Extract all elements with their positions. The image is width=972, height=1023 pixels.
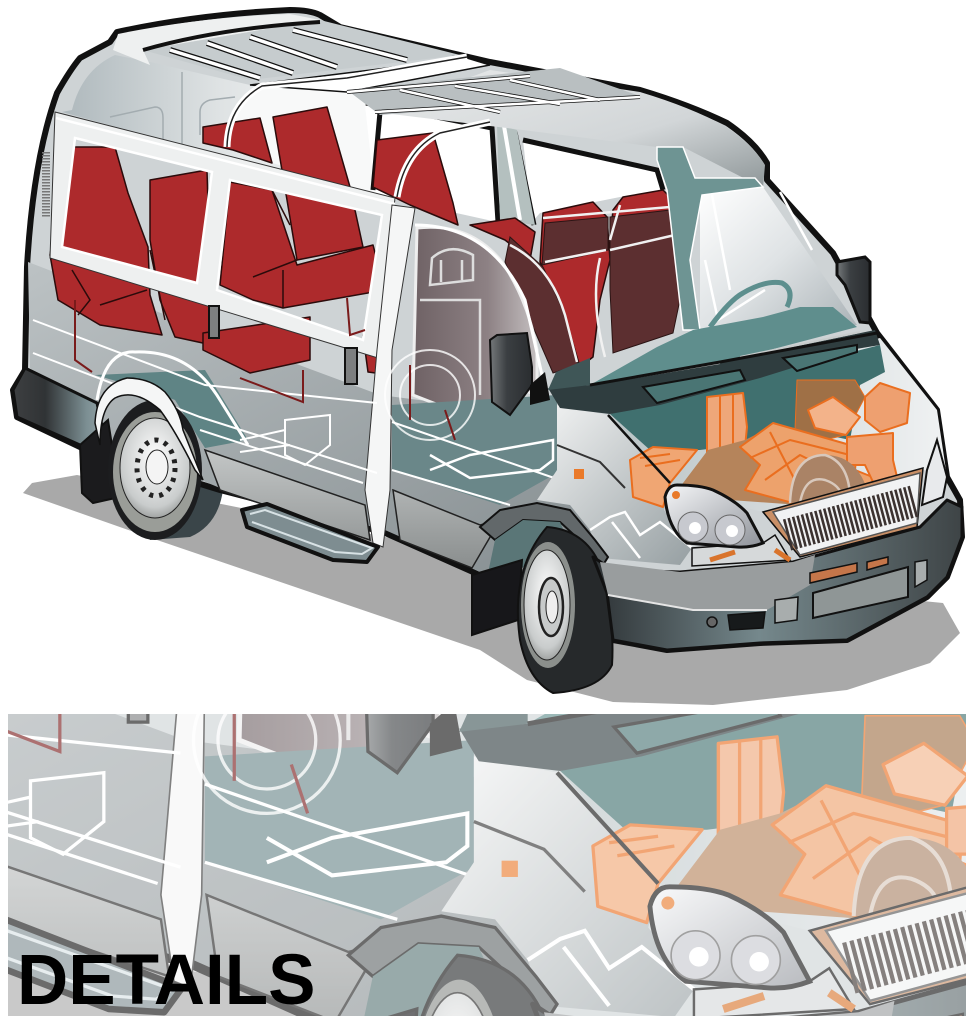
fender crease — [557, 445, 625, 488]
roof hoop rails — [227, 57, 490, 197]
brake lines — [75, 298, 455, 440]
front bumper — [593, 500, 962, 650]
side step — [242, 504, 378, 562]
seat contour lines — [72, 190, 297, 320]
enlarged van crop — [8, 714, 966, 1016]
dashboard — [590, 307, 857, 385]
door handles — [209, 306, 357, 384]
upper body pillar — [365, 205, 415, 547]
hood teal area — [610, 345, 885, 450]
roof rack — [143, 20, 640, 115]
minivan illustration — [13, 10, 962, 705]
wheel-well interior — [488, 520, 570, 573]
lower door sill — [205, 450, 500, 568]
right headlight — [922, 440, 947, 505]
rear vent grille — [42, 152, 50, 218]
body silhouette — [13, 10, 962, 650]
wipers and vents — [643, 345, 857, 403]
front mud flap — [472, 560, 522, 635]
rear wheel — [108, 400, 202, 540]
bumper openings — [707, 557, 927, 630]
interior panel outlines — [110, 72, 235, 160]
headlight — [665, 485, 763, 547]
front roof panel — [375, 70, 765, 188]
rear roof pillar — [113, 14, 320, 65]
far-side tyre — [110, 410, 223, 540]
far mirror — [837, 257, 870, 323]
rear seats — [50, 107, 682, 375]
engine cylinder — [790, 455, 870, 503]
front seat dark backs — [505, 210, 682, 373]
front fender — [537, 405, 692, 565]
door frame curve — [415, 225, 542, 375]
ground shadow — [23, 475, 960, 705]
side marker — [574, 469, 584, 479]
rear bumper — [13, 368, 105, 445]
rear interior wall — [62, 55, 380, 200]
rear wheel well teal — [95, 370, 248, 448]
chassis rails — [33, 320, 670, 525]
suspension outlines — [97, 352, 248, 445]
A pillar — [657, 147, 763, 330]
windscreen interior lines — [705, 192, 812, 320]
steering wheel — [710, 282, 790, 327]
rear wheel arch — [95, 378, 203, 480]
far side window openings — [365, 105, 663, 222]
grille — [763, 468, 923, 557]
engine parts — [630, 380, 910, 507]
rear mud flap — [80, 420, 120, 503]
hood — [610, 338, 947, 512]
lower body side — [28, 262, 605, 572]
near mirror — [490, 333, 532, 415]
white seat outlines — [510, 205, 675, 362]
bumper upper lighter band — [600, 555, 815, 610]
windscreen — [700, 187, 857, 330]
under-headlight bracket — [692, 535, 790, 566]
heading: DETAILS: DETAILS — [17, 941, 315, 1020]
door window — [413, 227, 537, 425]
dark cowl — [548, 330, 880, 414]
door headrest outline — [420, 249, 480, 395]
details panel — [8, 714, 966, 1016]
lower fender wiring — [590, 512, 692, 558]
near window frame — [50, 112, 395, 358]
front arch — [480, 503, 608, 570]
front wheel — [518, 527, 612, 693]
window frame lines — [56, 118, 395, 340]
